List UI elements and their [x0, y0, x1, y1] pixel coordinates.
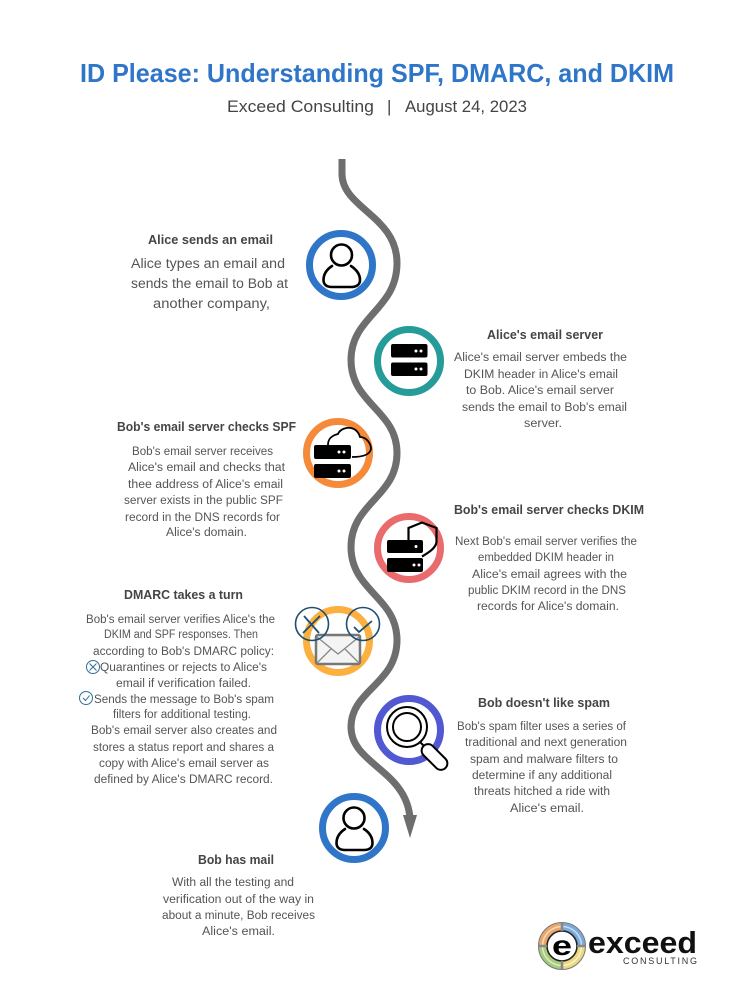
text: Bob's email server checks SPF: Bob's email server checks SPF [117, 420, 296, 434]
text: Bob's email server checks DKIM: Alice's email agrees with the [472, 569, 627, 581]
icon: Alice's email server [378, 330, 440, 392]
text: Bob doesn't like spam: Bob doesn't like spam [478, 696, 610, 710]
text: Bob's email server checks DKIM: Bob's email server checks DKIM [454, 503, 644, 517]
text: Bob's email server checks SPF: Alice's email and checks that [128, 462, 286, 474]
text: DMARC takes a turn: according to Bob's DMARC policy: [93, 646, 274, 658]
text: DMARC takes a turn: DMARC takes a turn [124, 588, 243, 602]
icon: Bob person [322, 796, 386, 860]
title: ID Please: Understanding SPF, DMARC, and DKIM [80, 58, 674, 88]
text: Bob's email server checks SPF: Alice's domain. [166, 527, 247, 539]
text: Bob has mail: verification out of the way in [163, 894, 314, 906]
text: Bob's email server checks SPF: Bob's email server receives [132, 446, 273, 458]
text: Alice sends an email: another company, [153, 296, 270, 311]
text: Alice's email server: Alice's email server embeds the [454, 352, 627, 364]
text: Alice's email server: sends the email to Bob's email [462, 402, 627, 414]
icon: small reject mark [86, 660, 100, 674]
text: Bob's email server checks DKIM: embedded DKIM header in [478, 552, 614, 564]
text: DMARC takes a turn: Quarantines or rejects to Alice's [100, 662, 267, 674]
timeline arrow [342, 159, 417, 838]
text: Alice's email server [454, 328, 627, 430]
text: Bob has mail: Alice's email. [202, 926, 275, 938]
text: DMARC takes a turn: filters for additional testing. [113, 709, 251, 721]
text: Alice sends an email: sends the email to Bob at [131, 276, 288, 291]
text: Bob's email server checks DKIM: Next Bob's email server verifies the [455, 536, 637, 548]
logo: Exceed Consulting: e [552, 930, 572, 961]
text: Bob's email server checks DKIM: records for Alice's domain. [477, 601, 619, 613]
text: Bob has mail [162, 853, 315, 938]
text: DMARC takes a turn [86, 588, 277, 786]
text: Alice's email server: DKIM header in Alice's email [464, 369, 618, 381]
text: Bob doesn't like spam: spam and malware filters to [470, 754, 618, 766]
text: DMARC takes a turn: email if verification failed. [116, 678, 251, 690]
text: Bob doesn't like spam: Bob's spam filter uses a series of [457, 721, 627, 733]
text: Bob's email server checks DKIM: public DKIM record in the DNS [468, 585, 626, 597]
text: Alice's email server: to Bob. Alice's email server [466, 385, 614, 397]
text: DMARC takes a turn: Sends the message to Bob's spam [94, 694, 274, 706]
text: DMARC takes a turn: stores a status report and shares a [93, 742, 275, 754]
text: Bob has mail: With all the testing and [172, 877, 294, 889]
subtitle: Exceed Consulting [227, 97, 374, 116]
logo: Exceed Consulting [538, 922, 697, 970]
icon: server with cloud [306, 422, 371, 484]
subtitle [227, 97, 527, 116]
text: Bob doesn't like spam: determine if any additional [472, 770, 612, 782]
text: Alice's email server: server. [524, 418, 562, 430]
text: Bob doesn't like spam: traditional and next generation [465, 737, 627, 749]
text: Bob's email server checks DKIM [454, 503, 644, 613]
icon: small accept mark [80, 692, 92, 704]
subtitle: | [387, 97, 391, 116]
text: DMARC takes a turn: defined by Alice's DMARC record. [94, 774, 273, 786]
text: Bob doesn't like spam [457, 696, 627, 815]
text: DMARC takes a turn: Bob's email server also creates and [91, 725, 277, 737]
text: DMARC takes a turn: copy with Alice's email server as [99, 758, 269, 770]
text: Bob has mail: about a minute, Bob receives [162, 910, 315, 922]
logo: Exceed Consulting: CONSULTING [623, 956, 697, 966]
text: Bob has mail: Bob has mail [198, 853, 274, 867]
text: Bob doesn't like spam: Alice's email. [510, 803, 584, 815]
text: Bob's email server checks SPF: record in the DNS records for [125, 512, 280, 524]
text: Bob doesn't like spam: threats hitched a ride with [474, 786, 610, 798]
text: Alice sends an email: Alice types an email and [131, 256, 285, 271]
icon: spam magnifier [378, 698, 450, 773]
subtitle: August 24, 2023 [405, 97, 527, 116]
text: Bob's email server checks SPF [117, 420, 296, 539]
logo: Exceed Consulting: exceed [588, 925, 697, 960]
text: Alice sends an email: Alice sends an email [148, 233, 273, 247]
text: DMARC takes a turn: DKIM and SPF responses. Then [104, 629, 258, 641]
icon: Alice person [310, 234, 372, 296]
text: DMARC takes a turn: Bob's email server verifies Alice's the [86, 614, 275, 626]
text: Alice's email server: Alice's email server [487, 328, 603, 342]
text: Bob's email server checks SPF: thee address of Alice's email [128, 479, 283, 491]
text: Alice sends an email [131, 233, 288, 311]
icon: DMARC envelope with reject and accept [296, 608, 380, 672]
icon: server with shield [378, 516, 440, 580]
text: Bob's email server checks SPF: server exists in the public SPF [124, 495, 283, 507]
